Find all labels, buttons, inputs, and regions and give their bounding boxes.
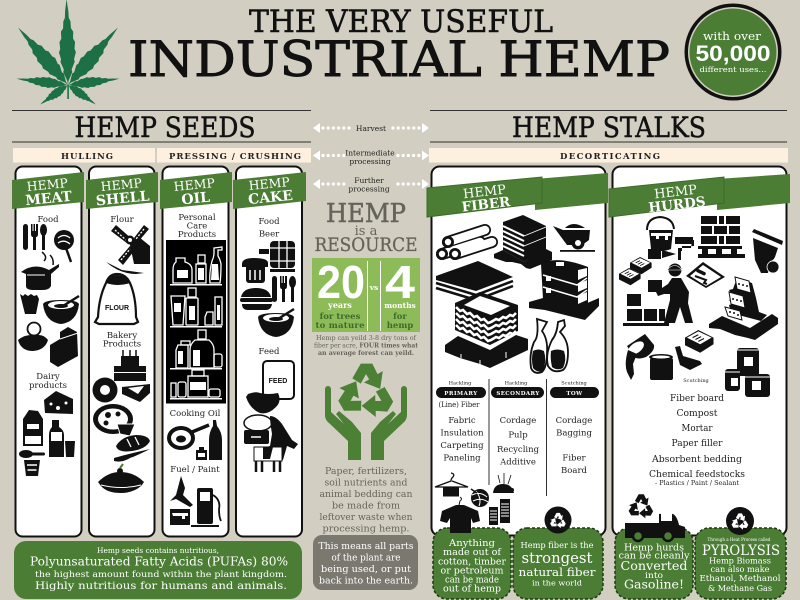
- panel: hemp shell: [86, 166, 158, 536]
- callout: strongest fiber: in the world: [532, 578, 582, 588]
- callout: made out of hemp: made out of: [443, 547, 502, 558]
- processing bars: PRESSING / CRUSHING: [169, 152, 301, 162]
- panel: hemp hurds: [609, 166, 790, 536]
- panel: hemp cake: Food: [258, 217, 280, 227]
- callout: PUFAs: Hemp seeds contains nutritious,: [97, 546, 219, 555]
- text: tow column: Fiber: [562, 454, 587, 464]
- callout: pyrolysis: & Methane Gas: [708, 584, 772, 593]
- badge: 50,000 uses: with over: [703, 29, 762, 43]
- icon: dairy group: [19, 391, 75, 476]
- panel: 20 years vs 4 months: [312, 256, 420, 332]
- panel: hemp oil: Cooking Oil: [170, 409, 221, 419]
- text: hurds uses: [649, 378, 745, 487]
- panel: 20 years vs 4 months: for trees: [320, 312, 361, 322]
- heading: hemp stalks: HEMP STALKS: [512, 111, 706, 144]
- callout: all parts used: back into the earth.: [319, 576, 413, 586]
- process arrows: Further: [354, 176, 384, 185]
- icon: pan and oil: [167, 420, 222, 460]
- panel: hemp meat: HEMP: [26, 175, 69, 194]
- panel: 20 years vs 4 months: months: [384, 301, 416, 310]
- callout: pyrolysis: PYROLYSIS: [702, 543, 780, 559]
- text: yield note: fiber per acre, FOUR times what: [314, 342, 418, 350]
- text: leftover waste: animal bedding can: [320, 489, 412, 500]
- callout: gasoline: can be cleanly: [618, 552, 690, 562]
- callout: gasoline: Converted: [620, 559, 688, 573]
- icon: windmill and wheat: [106, 225, 150, 274]
- text: primary column: [436, 380, 486, 464]
- panel: hemp hurds: HURDS: [648, 194, 706, 216]
- panel: hemp shell: Flour: [110, 215, 135, 225]
- text: tow column: TOW: [566, 391, 583, 397]
- text: tow column: Board: [561, 466, 588, 476]
- title: [128, 4, 670, 88]
- text: primary column: Carpeting: [440, 441, 484, 451]
- badge: 50,000 uses: 50,000: [696, 41, 770, 66]
- callout: pyrolysis: [695, 528, 786, 599]
- text: secondary column: Pulp: [508, 430, 528, 440]
- callout: strongest fiber: [513, 528, 603, 599]
- callout: all parts used: This means all parts: [318, 541, 414, 552]
- text: secondary column: Additive: [499, 458, 536, 468]
- callout: made out of hemp: Anything: [448, 538, 495, 549]
- text: hurds uses: Chemical feedstocks: [649, 470, 745, 480]
- icon: bakery goods: [92, 350, 150, 493]
- badge: 50,000 uses: [684, 4, 782, 100]
- callout: all parts used: [313, 535, 418, 590]
- text: yield note: an average forest can yeild.: [318, 350, 414, 357]
- panel: hemp cake: Feed: [259, 347, 280, 357]
- text: yield note: Hemp can yeild 3-8 dry tons of: [316, 335, 417, 342]
- icon: t-shirt and hanger: [440, 497, 480, 533]
- panel: hemp oil: HEMP: [173, 175, 216, 194]
- panel: hemp cake: Beer: [259, 230, 280, 240]
- process arrows: Intermediate: [345, 148, 395, 158]
- text: hurds uses: Compost: [676, 409, 718, 419]
- text: primary column: Fabric: [448, 416, 476, 426]
- text: tow column: Scutching: [561, 380, 588, 386]
- panel: hemp fiber: FIBER: [461, 194, 512, 216]
- panel: hemp oil: [160, 166, 232, 536]
- icon: recycling tire, hurds: [726, 507, 754, 535]
- text: tow column: [550, 380, 599, 476]
- panel: hemp fiber: [427, 166, 608, 536]
- icon: food and beer group: [240, 241, 296, 337]
- icon: personal care shelves: [166, 240, 226, 404]
- panel: hemp oil: Fuel / Paint: [170, 465, 220, 475]
- icon: building materials: [619, 216, 783, 397]
- text: secondary column: Cordage: [500, 416, 536, 426]
- text: hurds uses: Fiber board: [670, 394, 724, 404]
- panel: hemp meat: Food: [37, 215, 59, 225]
- process arrows: processing: [349, 157, 391, 166]
- panel: 20 years vs 4 months: vs: [369, 283, 378, 292]
- text: hurds uses: Scutching: [683, 378, 710, 384]
- callout: pyrolysis: Ethanol, Methanol: [700, 574, 781, 583]
- text: tow column: Bagging: [556, 428, 592, 438]
- callout: gasoline: [615, 528, 693, 599]
- heading: hemp seeds: HEMP SEEDS: [74, 111, 256, 144]
- text: leftover waste: processing hemp.: [322, 524, 410, 534]
- text: hurds uses: Paper filler: [672, 439, 723, 449]
- processing bars: [13, 148, 788, 162]
- panel: 20 years vs 4 months: hemp: [387, 321, 413, 331]
- panel: 20 years vs 4 months: 20: [317, 256, 365, 308]
- heading: hemp is a resource: RESOURCE: [314, 234, 418, 256]
- heading: hemp is a resource: [314, 199, 418, 256]
- icon: paintbrush, can and pump: [170, 476, 221, 527]
- panel: hemp cake: [233, 166, 306, 536]
- callout: gasoline: Hemp hurds: [624, 544, 684, 554]
- icon: recycling tire, fiber: [544, 506, 572, 534]
- icon: fiber materials: [436, 215, 599, 373]
- heading: hemp is a resource: is a: [355, 224, 378, 239]
- callout: pyrolysis: can also make: [710, 565, 770, 574]
- text: hurds uses: - Plastics / Paint / Sealant: [655, 479, 739, 487]
- callout: PUFAs: the highest amount found within the plant kingdom.: [35, 570, 287, 580]
- text: secondary column: Recycling: [497, 445, 540, 455]
- callout: made out of hemp: cotton, timber: [438, 556, 506, 568]
- callout: pyrolysis: Hemp Biomass: [709, 556, 771, 566]
- icon: recycling truck: [625, 494, 685, 541]
- callout: strongest fiber: strongest: [522, 549, 592, 567]
- text: hurds uses: Mortar: [682, 424, 713, 434]
- text: primary column: (Line) Fiber: [438, 401, 480, 409]
- panel: hemp hurds: HEMP: [653, 183, 698, 203]
- icon: recycling hands: [325, 364, 407, 460]
- text: primary column: PRIMARY: [444, 391, 478, 397]
- process arrows: [313, 123, 429, 194]
- icon: feed sack: [263, 361, 294, 399]
- icon: feed sack: FEED: [269, 378, 287, 385]
- panel: 20 years vs 4 months: years: [327, 300, 352, 310]
- callout: PUFAs: [14, 541, 302, 599]
- callout: all parts used: of the plant are: [332, 552, 401, 564]
- panel: hemp cake: HEMP: [248, 174, 290, 193]
- callout: all parts used: being used, or put: [321, 564, 411, 575]
- icon: flour sack: FLOUR: [105, 305, 129, 312]
- panel: 20 years vs 4 months: to mature: [316, 321, 365, 331]
- process arrows: processing: [348, 184, 390, 194]
- panel: hemp meat: Dairy: [36, 372, 60, 382]
- icon: animals group: [244, 392, 298, 472]
- panel: hemp oil: Products: [178, 230, 216, 240]
- text: secondary column: SECONDARY: [496, 391, 540, 397]
- panel: hemp shell: Products: [103, 340, 141, 350]
- processing bars: HULLING: [61, 152, 113, 162]
- panel: hemp meat: [12, 166, 84, 536]
- icon: food group: [18, 224, 79, 367]
- text: leftover waste: leftover waste when: [320, 512, 412, 523]
- title: INDUSTRIAL HEMP: [128, 31, 670, 88]
- callout: gasoline: into: [645, 571, 663, 580]
- text: yield note: [314, 335, 418, 357]
- text: leftover waste: [320, 466, 412, 534]
- callout: gasoline: Gasoline!: [624, 578, 684, 592]
- callout: made out of hemp: [433, 528, 511, 599]
- callout: strongest fiber: natural fiber: [518, 566, 596, 579]
- callout: PUFAs: Polyunsaturated Fatty Acids (PUFAs) 80%: [30, 554, 288, 568]
- title: THE VERY USEFUL: [249, 4, 553, 40]
- callout: PUFAs: Highly nutritious for humans and animals.: [35, 580, 287, 592]
- text: leftover waste: be made from: [332, 500, 400, 512]
- panel: hemp fiber: HEMP: [462, 183, 507, 202]
- callout: made out of hemp: or petroleum: [440, 566, 504, 576]
- text: primary column: Paneling: [443, 454, 481, 464]
- panel: hemp oil: Personal: [178, 213, 216, 223]
- panel: hemp shell: SHELL: [95, 188, 150, 210]
- panel: hemp meat: products: [29, 381, 67, 391]
- icon: flour sack: [95, 274, 138, 324]
- panel: 20 years vs 4 months: for: [393, 312, 407, 322]
- callout: made out of hemp: can be made: [445, 574, 499, 586]
- panel: 20 years vs 4 months: 4: [385, 256, 415, 308]
- heading: hemp is a resource: HEMP: [326, 199, 406, 229]
- panel: hemp shell: HEMP: [100, 175, 143, 194]
- text: secondary column: Hackling: [505, 380, 528, 386]
- text: leftover waste: soil nutrients and: [324, 478, 408, 488]
- text: secondary column: [491, 380, 544, 468]
- text: leftover waste: Paper, fertilizers,: [325, 466, 407, 477]
- processing bars: DECORTICATING: [560, 152, 660, 162]
- process arrows: Harvest: [356, 124, 386, 133]
- text: hurds uses: Absorbent bedding: [651, 455, 742, 465]
- hemp leaf icon: [12, 0, 124, 108]
- callout: made out of hemp: out of hemp: [443, 584, 501, 594]
- text: primary column: Insulation: [440, 428, 484, 438]
- icon: textile goods: [435, 473, 514, 525]
- callout: pyrolysis: Through a Heat Process called: [708, 537, 771, 542]
- panel: hemp shell: Bakery: [107, 331, 137, 341]
- panel: hemp oil: Care: [187, 222, 207, 232]
- panel: hemp oil: OIL: [181, 190, 211, 208]
- panel: hemp cake: CAKE: [247, 188, 294, 208]
- panel: hemp meat: MEAT: [25, 189, 73, 209]
- badge: 50,000 uses: different uses...: [700, 65, 766, 74]
- text: primary column: Hackling: [449, 380, 472, 386]
- text: tow column: Cordage: [556, 416, 592, 426]
- callout: strongest fiber: Hemp fiber is the: [520, 541, 594, 550]
